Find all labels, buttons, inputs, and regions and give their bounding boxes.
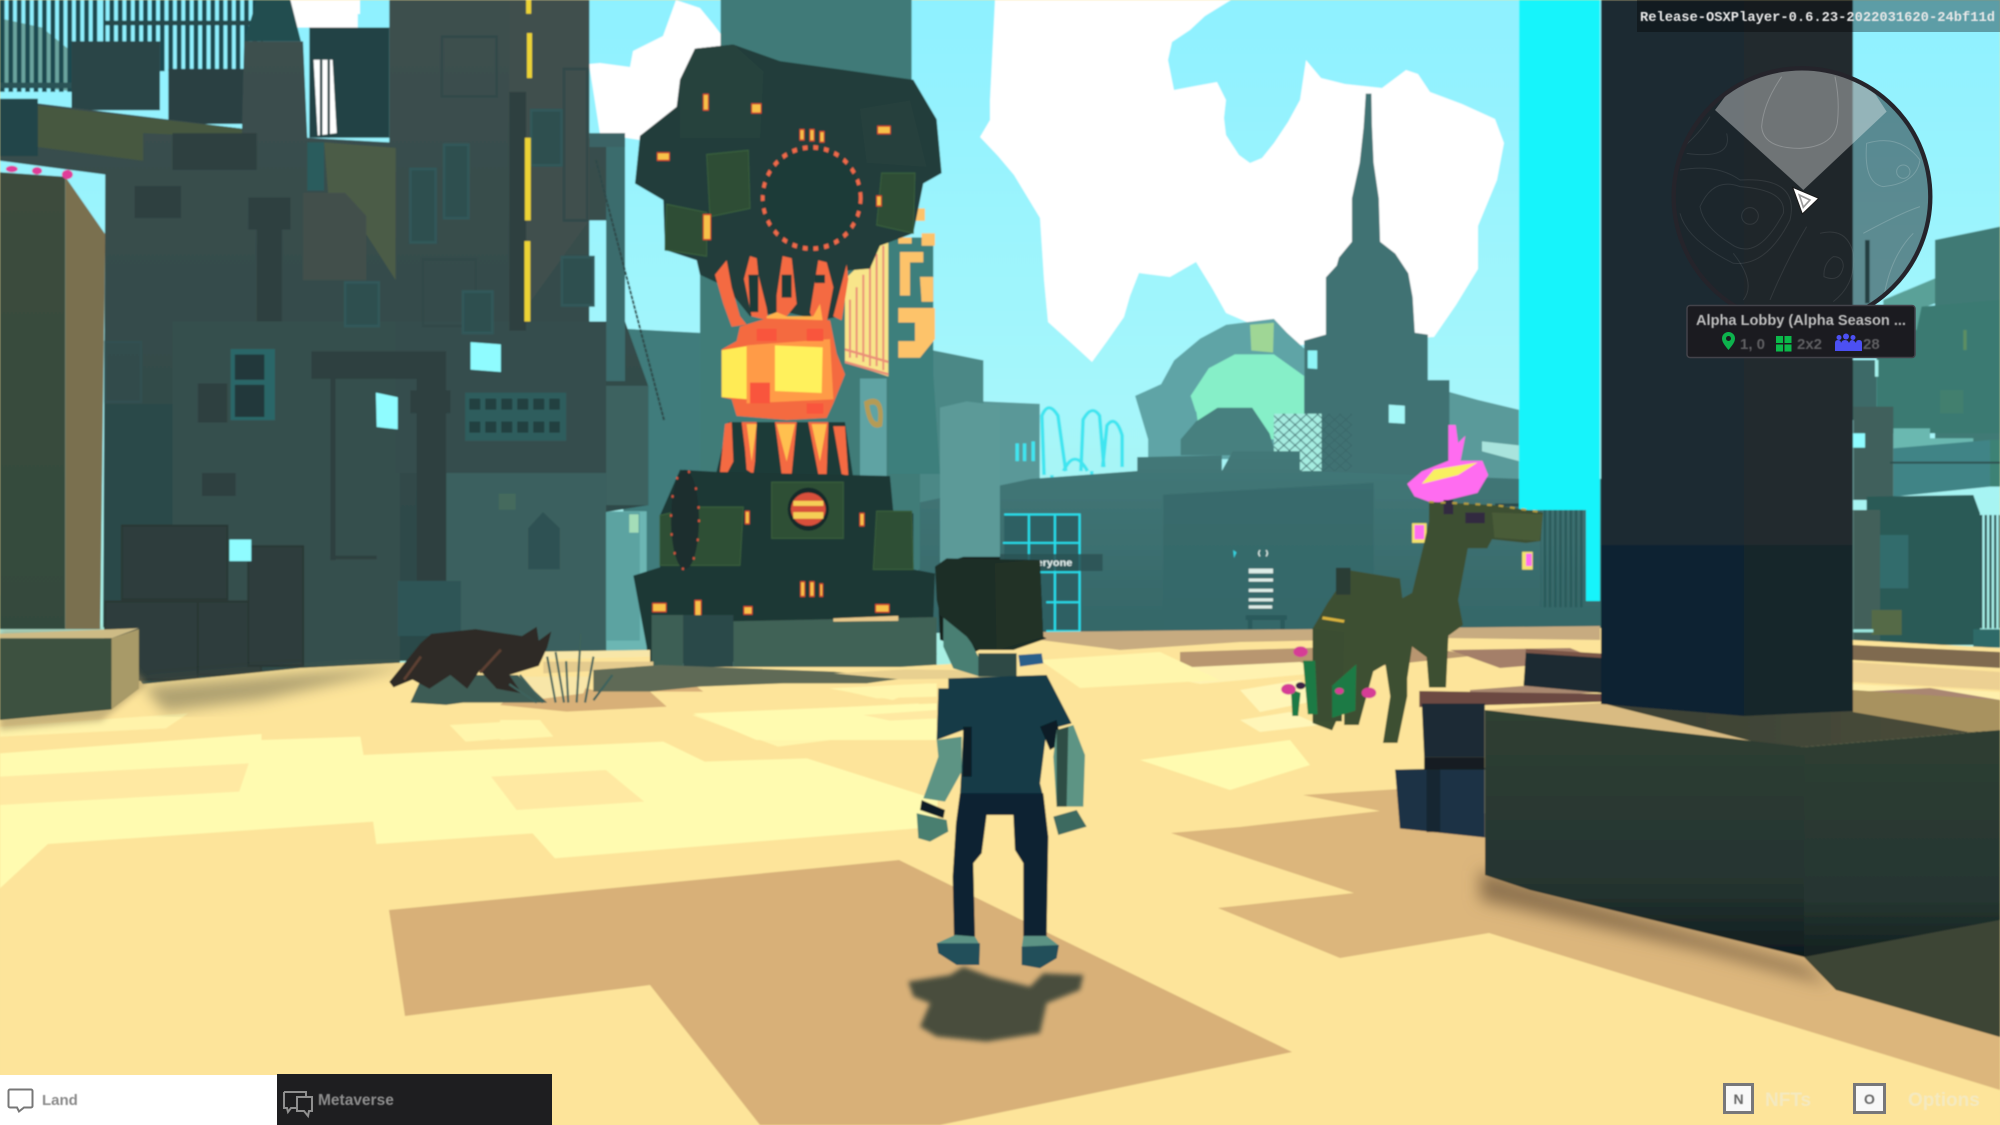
face and neck [943, 603, 1017, 677]
avatar shadow [908, 967, 1083, 1042]
desert grass [509, 634, 612, 703]
base left face [1485, 710, 1804, 957]
cactus [1281, 646, 1376, 718]
reactor head [635, 45, 942, 320]
trousers [953, 793, 1048, 937]
name tag: everyone [1025, 558, 1072, 569]
button: Options: O [1864, 1091, 1875, 1107]
pillar base cast shadow [1804, 905, 2000, 1037]
pink flowers [6, 166, 73, 179]
player count [1835, 334, 1880, 353]
pink crest [1407, 425, 1488, 504]
glowing cyan windows [229, 342, 501, 561]
coordinates: 1, 0 [1740, 336, 1765, 353]
plot size [1776, 336, 1822, 353]
cyan light column [1519, 0, 1600, 601]
guy wire [596, 160, 664, 420]
plinth [733, 617, 937, 677]
base right face [1804, 730, 2000, 957]
billboard [845, 208, 935, 425]
cyan wireframe grid [1003, 514, 1080, 631]
build version bar: Release-OSXPlayer-0.6.23-2022031620-24bf11d [1640, 10, 1995, 26]
reactor backdrop towers [593, 0, 1000, 652]
lit windows [657, 94, 890, 240]
neck [978, 653, 1017, 677]
player arrow [1793, 187, 1819, 214]
left arm [917, 737, 962, 842]
player avatar [908, 558, 1087, 1042]
upper flame spikes [715, 256, 848, 327]
far sand bands [1040, 626, 2000, 732]
distant skyline and dome [767, 94, 1603, 633]
button: NFTs: NFTs [1765, 1090, 1811, 1111]
tab: Land [0, 1075, 277, 1125]
icon: chat bubble [8, 1090, 32, 1112]
main pillar [1601, 0, 1853, 716]
crates [105, 526, 303, 680]
minimap ring [1674, 68, 1930, 325]
signage stripes [1233, 550, 1287, 631]
crates by pillar [1395, 649, 1601, 837]
olive balcony bands [38, 106, 242, 161]
reactor tower [633, 45, 1000, 677]
reactor base [633, 470, 937, 665]
lower flame spikes [720, 422, 848, 476]
wall beams and details [135, 92, 526, 581]
green cooling blocks [665, 150, 915, 256]
tab: Metaverse [277, 1074, 552, 1125]
llama with pink crest [1281, 425, 1601, 837]
tower shadow on ground [500, 650, 978, 740]
icon: double chat bubbles [284, 1092, 312, 1116]
contour lines [1680, 77, 1920, 302]
dome [1135, 319, 1304, 459]
ground plane [0, 626, 2000, 1125]
right side distant buildings [1850, 227, 2000, 648]
grated window [465, 393, 566, 441]
sky [0, 0, 2000, 680]
shirt [937, 675, 1072, 797]
hair [935, 558, 1047, 650]
build version bar [1637, 0, 2000, 32]
left voxel building [0, 0, 648, 684]
far signage [1412, 523, 1533, 570]
vision cone [1715, 70, 1886, 190]
coordinates [1722, 332, 1765, 353]
mid-ground blocks [918, 451, 1603, 633]
far slatted structure and rod [1495, 402, 1600, 607]
minimap disc [1674, 68, 1930, 325]
soft contact shadow under base [1480, 870, 1830, 985]
base green panels [660, 482, 913, 569]
plot size: 2x2 [1797, 336, 1822, 353]
clouds [288, 0, 1504, 362]
yellow neon strip [524, 0, 532, 321]
location card [1687, 306, 1915, 358]
plaza block left [0, 166, 612, 730]
button: Options [1854, 1084, 1980, 1112]
side wheel [671, 470, 699, 569]
shoes distant [1018, 653, 1043, 667]
tab: Land: Land [42, 1092, 78, 1109]
base top sunlit [1485, 703, 1804, 747]
right shoe [1022, 936, 1059, 968]
dial ring [763, 147, 861, 249]
louvered windows [105, 110, 593, 402]
base lit windows [653, 511, 889, 618]
dark sand tile centre [389, 860, 1292, 1125]
name tag [996, 554, 1103, 571]
base vent [788, 488, 829, 531]
right arm [1053, 725, 1087, 835]
adjacent dark machine [937, 557, 1000, 652]
player count: 28 [1863, 336, 1880, 353]
tab: Metaverse: Metaverse [318, 1092, 394, 1109]
pale tiles [0, 683, 938, 888]
building mass [0, 0, 648, 684]
dark window [231, 349, 275, 420]
button: NFTs: N [1733, 1091, 1744, 1107]
llama body [1313, 502, 1543, 743]
fireball core [722, 318, 845, 420]
chain link fence [1274, 414, 1352, 471]
dark core below fireball [715, 422, 853, 478]
button: NFTs [1724, 1084, 1811, 1112]
skyscraper [1304, 94, 1449, 514]
button: Options: Options [1908, 1090, 1980, 1111]
horned creature [389, 627, 551, 705]
minimap [1672, 70, 1932, 305]
location title: Alpha Lobby (Alpha Season ... [1696, 313, 1906, 329]
cyan arches [1017, 408, 1131, 526]
dark sand tile right with base shadow [1171, 789, 2000, 1090]
ground shading behind base [1853, 690, 2000, 732]
base top shaded [1601, 703, 2000, 747]
main pillar base [1485, 690, 2000, 957]
arched window [528, 512, 560, 569]
left shoe [937, 935, 980, 965]
rooftop fence [0, 0, 389, 138]
